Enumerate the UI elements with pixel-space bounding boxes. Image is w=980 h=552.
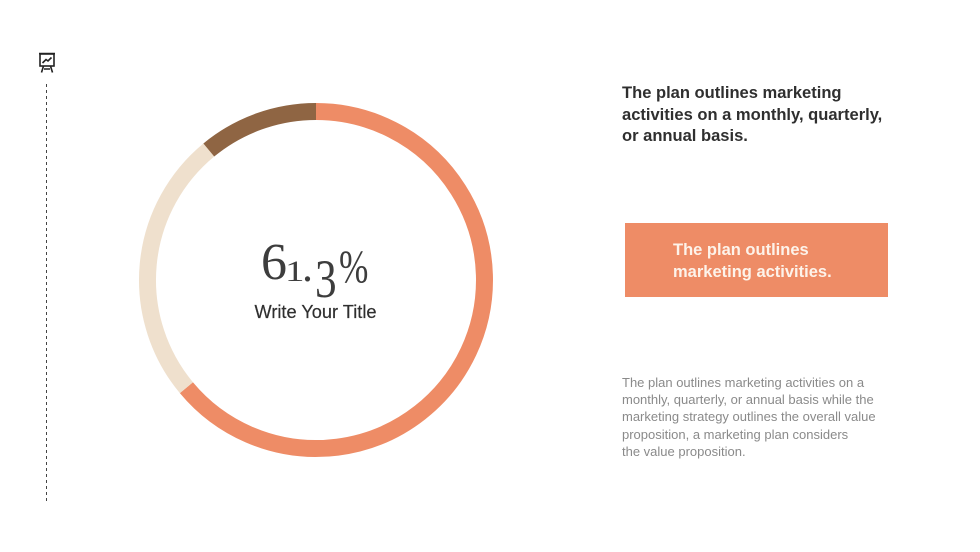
segment: beige [147, 150, 209, 388]
segment: brown [209, 112, 316, 150]
heading text: The plan outlines marketing [622, 83, 842, 102]
callout box [625, 223, 888, 297]
big percentage value: % [339, 241, 368, 293]
big percentage value: 1 [285, 255, 304, 288]
big percentage value [261, 234, 368, 309]
body paragraph: The plan outlines marketing activities on a [622, 375, 864, 390]
callout text: marketing activities. [673, 262, 832, 280]
big percentage value: . [302, 242, 313, 291]
icon: presentation board [39, 52, 55, 73]
heading text [622, 83, 882, 145]
heading text: activities on a monthly, quarterly, [622, 104, 882, 124]
callout text [673, 241, 832, 280]
big percentage value: 6 [261, 234, 287, 291]
dashed vertical timeline [46, 84, 47, 501]
segment: orange 61.3% [186, 112, 484, 448]
body paragraph: the value proposition. [622, 444, 746, 459]
body paragraph: proposition, a marketing plan considers [622, 427, 848, 442]
heading text: or annual basis. [622, 126, 748, 145]
callout text: The plan outlines [673, 241, 809, 259]
big percentage value: 3 [315, 249, 337, 309]
body paragraph: marketing strategy outlines the overall value [622, 409, 876, 424]
body paragraph: monthly, quarterly, or annual basis while the [622, 392, 874, 407]
chart title: Write Your Title [254, 302, 376, 322]
body paragraph [622, 375, 876, 459]
